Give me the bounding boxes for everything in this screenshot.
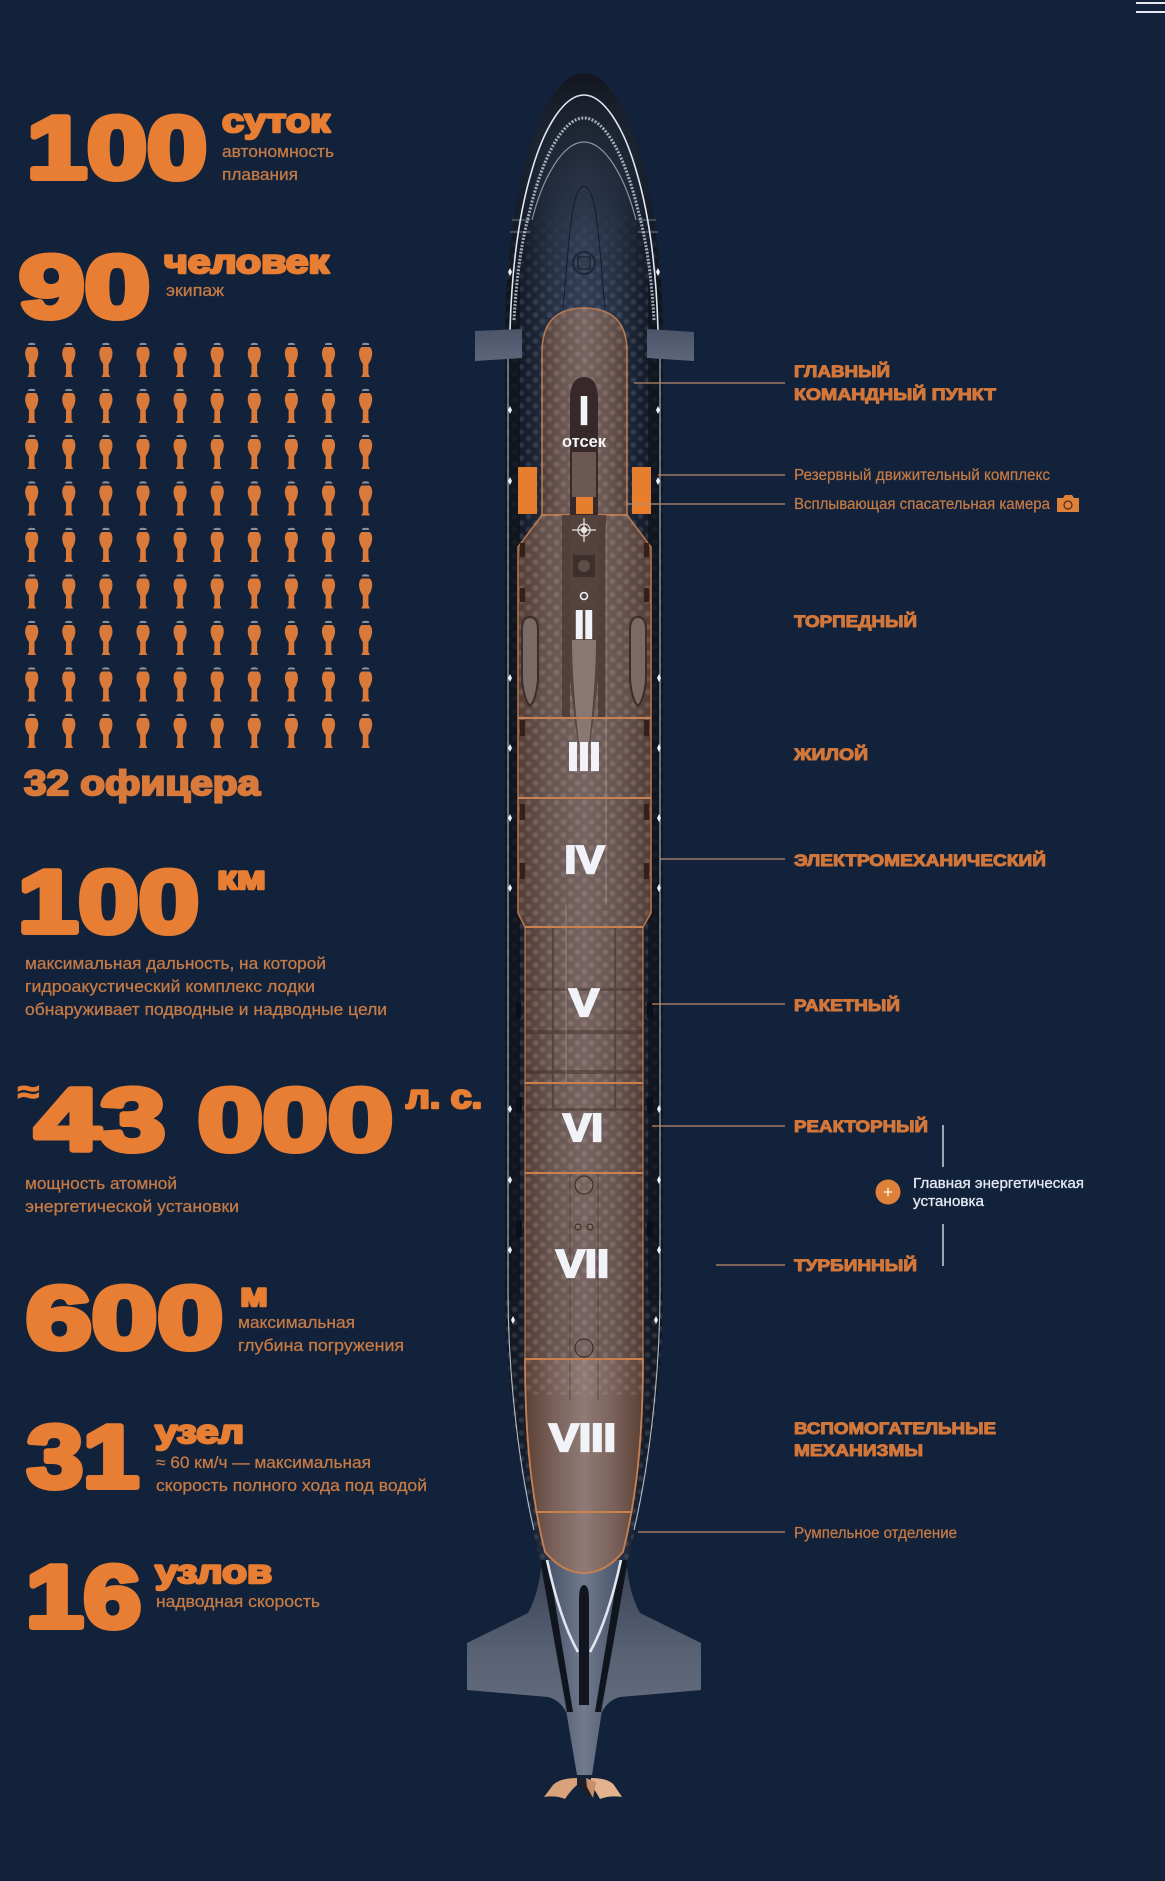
stat: 100 km: 100 [18, 852, 199, 951]
stat: 100 km: максимальная дальность, на которой [25, 955, 326, 973]
compartment numerals: V [569, 982, 599, 1025]
icon: target sight [572, 518, 596, 542]
heading: 32 officers: 32 офицера [24, 764, 261, 803]
stat: 600 m depth: м [240, 1276, 268, 1313]
stat: 100 km: обнаруживает подводные и надводные цели [25, 1001, 387, 1019]
stat: 16 knots: 16 [26, 1547, 141, 1646]
compartment numerals: VII [556, 1243, 609, 1286]
compartment numerals [549, 390, 616, 1460]
compartment numerals: VIII [549, 1417, 616, 1460]
stat: 31 knots: 31 [27, 1407, 139, 1506]
stat: 100 days: суток [222, 102, 331, 139]
stat: 100 days: плавания [222, 166, 298, 184]
stat: 600 m depth [26, 1268, 404, 1367]
label: living: ЖИЛОЙ [793, 745, 868, 764]
stat: 16 knots: узлов [155, 1553, 272, 1590]
stat: 90 crew: 90 [19, 237, 150, 336]
compartment numerals: IV [564, 839, 604, 882]
stat: 600 m depth: глубина погружения [238, 1337, 404, 1355]
hull black ports [516, 1002, 653, 1237]
bow hydroplanes [475, 329, 694, 361]
orange module: reserve propulsion right [632, 467, 651, 514]
stat: 100 days [27, 98, 334, 197]
label: missile: РАКЕТНЫЙ [794, 996, 900, 1015]
label: steering compartment: Румпельное отделение [794, 1525, 957, 1542]
dark grid of missile compartment [526, 928, 642, 1111]
label: auxiliary machinery: ВСПОМОГАТЕЛЬНЫЕ [794, 1420, 996, 1438]
stat: 600 m depth: максимальная [238, 1314, 355, 1332]
propeller [544, 1778, 622, 1799]
hull side markers [508, 268, 661, 1324]
stat: 100 km: гидроакустический комплекс лодки [25, 978, 315, 996]
hull shading [505, 73, 663, 1780]
conning tower channel [570, 377, 598, 515]
side ports [520, 543, 649, 879]
label: reactor: РЕАКТОРНЫЙ [794, 1117, 928, 1136]
label: turbine: ТУРБИННЫЙ [794, 1256, 917, 1275]
stat: 31 knots: узел [155, 1413, 244, 1450]
stat: 43 000 hp: 43 000 [35, 1070, 393, 1169]
compartment numerals: III [568, 736, 600, 779]
label: main command post: ГЛАВНЫЙ [794, 362, 890, 381]
rudder [579, 1585, 589, 1705]
compartment I [542, 308, 627, 515]
stat: 600 m depth: 600 [26, 1268, 223, 1367]
stat: 100 days: автономность [222, 143, 334, 161]
label: reserve propulsion: Резервный движительный комплекс [794, 467, 1050, 484]
hull [505, 73, 663, 1775]
compartment dividers [518, 718, 651, 1512]
stat: 31 knots: ≈ 60 км/ч — максимальная [156, 1454, 371, 1472]
label: torpedo: ТОРПЕДНЫЙ [794, 612, 917, 631]
stat: 16 knots: надводная скорость [156, 1593, 320, 1611]
crew pictogram grid [25, 343, 372, 748]
orange module: reserve propulsion left [518, 467, 537, 514]
compartments overlay [518, 308, 651, 1573]
submarine [467, 73, 701, 1799]
callout: main power plant: Главная энергетическая [913, 1175, 1084, 1192]
hull white contour lines [508, 95, 660, 1652]
label: main command post: КОМАНДНЫЙ ПУНКТ [794, 385, 996, 404]
icon: menu [1136, 2, 1165, 13]
stat: 90 crew: человек [164, 243, 330, 280]
stat: 100 km [18, 852, 387, 1019]
compartment VIII [525, 1359, 643, 1573]
stat: 100 days: 100 [27, 98, 207, 197]
thin lines [566, 525, 606, 1083]
compartment numerals: I [580, 390, 588, 433]
orange module: rescue chamber [576, 497, 593, 514]
overlay texture [518, 308, 651, 1395]
compartment numerals: II [574, 604, 594, 647]
label: rescue chamber: Всплывающая спасательная камера [794, 496, 1050, 513]
compartment numerals: VI [563, 1107, 603, 1150]
stat: 90 crew [19, 237, 330, 336]
stat: 43 000 hp [18, 1070, 482, 1216]
stat: 16 knots [26, 1547, 320, 1646]
label: electromechanical: ЭЛЕКТРОМЕХАНИЧЕСКИЙ [794, 851, 1046, 870]
stat: 31 knots: скорость полного хода под водой [156, 1477, 427, 1495]
stat: 90 crew: экипаж [166, 282, 224, 300]
callout: main power plant: установка [913, 1193, 985, 1210]
label: auxiliary machinery: МЕХАНИЗМЫ [794, 1442, 923, 1460]
compartment numerals: отсек [562, 432, 606, 451]
fins [467, 1568, 701, 1712]
stat: 43 000 hp: ≈ [18, 1076, 39, 1109]
label: main command post [634, 362, 996, 404]
stat: 43 000 hp: л. с. [406, 1078, 482, 1115]
compartments II-IV [518, 515, 651, 927]
stat: 43 000 hp: энергетической установки [25, 1198, 239, 1216]
stat: 100 km: км [217, 859, 266, 896]
callout: main power plant [876, 1125, 1084, 1266]
bow hatch [573, 252, 595, 274]
stat: 31 knots [27, 1407, 427, 1506]
icon: camera [1057, 495, 1079, 512]
compartments V-VII [525, 927, 643, 1359]
stat: 43 000 hp: мощность атомной [25, 1175, 177, 1193]
torpedo tubes [522, 617, 646, 706]
label: auxiliary machinery [794, 1420, 996, 1460]
